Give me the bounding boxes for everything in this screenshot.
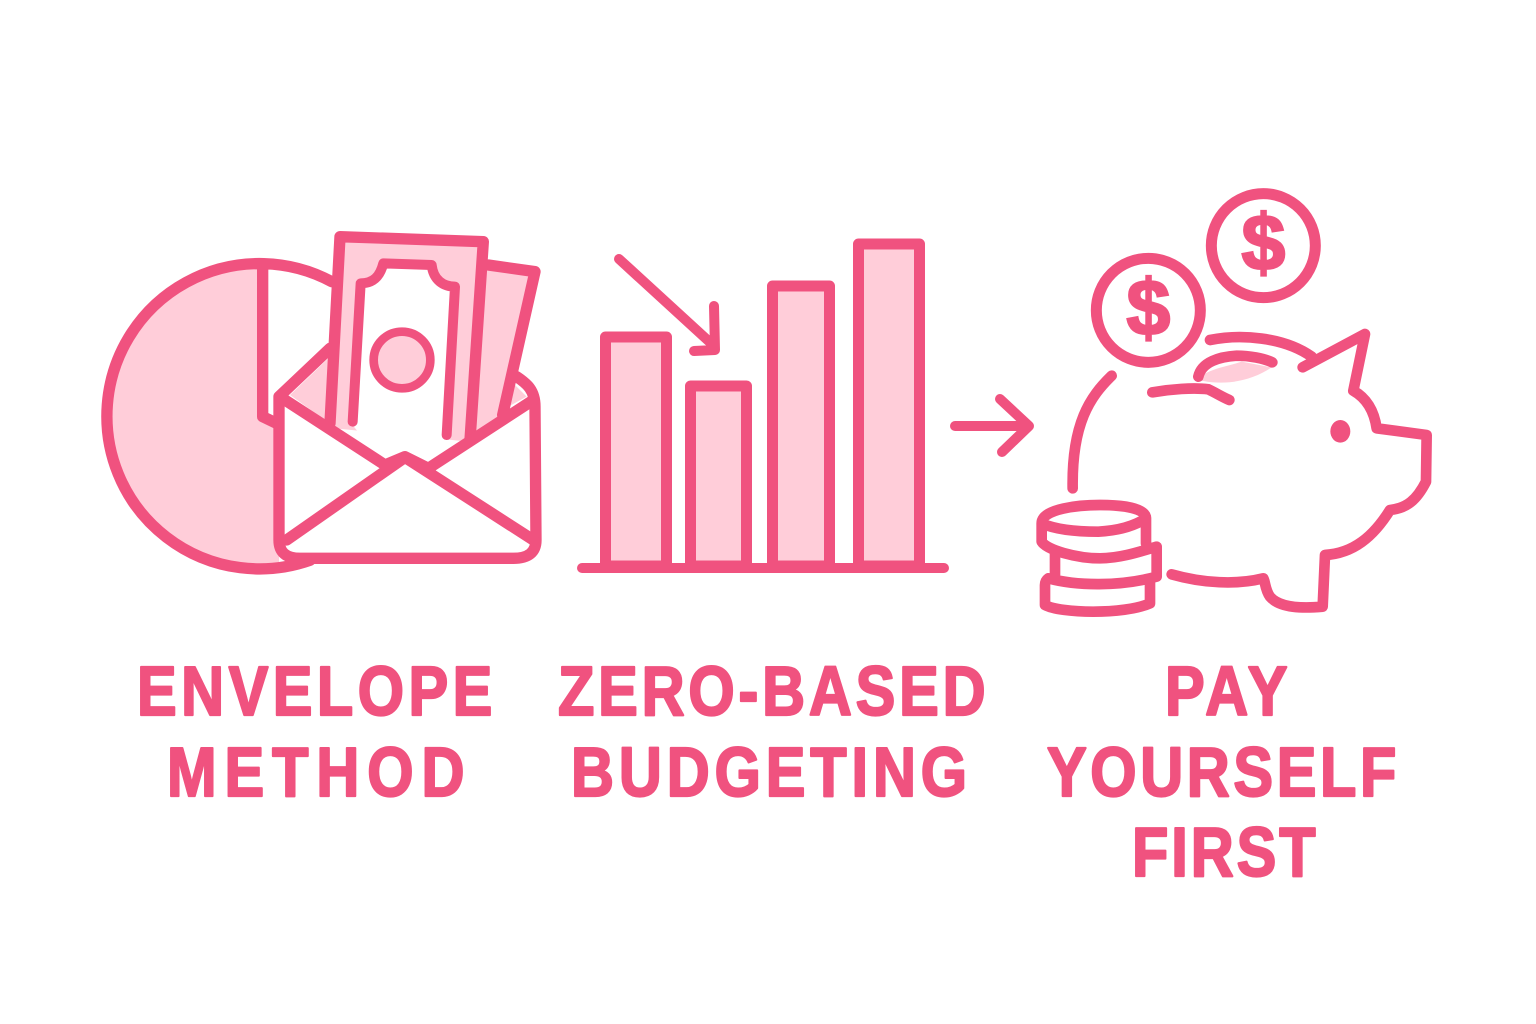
label: zero-based budgeting bbox=[558, 651, 986, 811]
label: pay yourself first: PAY bbox=[1165, 651, 1287, 730]
coin stack bbox=[1042, 505, 1157, 612]
label: zero-based budgeting: ZERO-BASED bbox=[558, 651, 986, 730]
pie chart outline bbox=[107, 264, 332, 569]
piggy bank outline bbox=[1073, 334, 1427, 607]
envelope body bbox=[279, 348, 536, 558]
icon: envelope with cash and pie chart bbox=[107, 237, 536, 569]
icon: zero-based budgeting bar chart bbox=[582, 244, 944, 568]
bar 4 bbox=[858, 244, 920, 566]
pie chart filled slice bbox=[109, 263, 290, 568]
back banknote bbox=[473, 265, 535, 433]
piggy bank eye bbox=[1330, 420, 1350, 443]
label: pay yourself first bbox=[1047, 651, 1396, 891]
coin with dollar sign, left: $ bbox=[1126, 263, 1170, 351]
bar 1 bbox=[606, 337, 666, 566]
label: envelope method: ENVELOPE bbox=[137, 651, 492, 730]
coin with dollar sign, right bbox=[1211, 194, 1315, 298]
envelope back flap fill bbox=[290, 358, 527, 420]
coin with dollar sign, left bbox=[1096, 258, 1200, 362]
bar 3 bbox=[772, 286, 830, 566]
envelope front flaps bbox=[285, 400, 533, 540]
label: pay yourself first: FIRST bbox=[1132, 812, 1316, 891]
arrow to pay yourself first bbox=[955, 399, 1029, 452]
coin with dollar sign, right: $ bbox=[1241, 199, 1285, 287]
coin slot fill bbox=[1198, 362, 1272, 383]
label: envelope method: METHOD bbox=[167, 732, 465, 811]
label: pay yourself first: YOURSELF bbox=[1047, 732, 1396, 811]
label: envelope method bbox=[137, 651, 492, 811]
icon: piggy bank with coins bbox=[1042, 194, 1427, 612]
front banknote bbox=[330, 237, 483, 467]
downward arrow bbox=[619, 259, 715, 351]
label: zero-based budgeting: BUDGETING bbox=[571, 732, 967, 811]
bar 2 bbox=[690, 386, 746, 566]
chart baseline bbox=[582, 563, 944, 573]
